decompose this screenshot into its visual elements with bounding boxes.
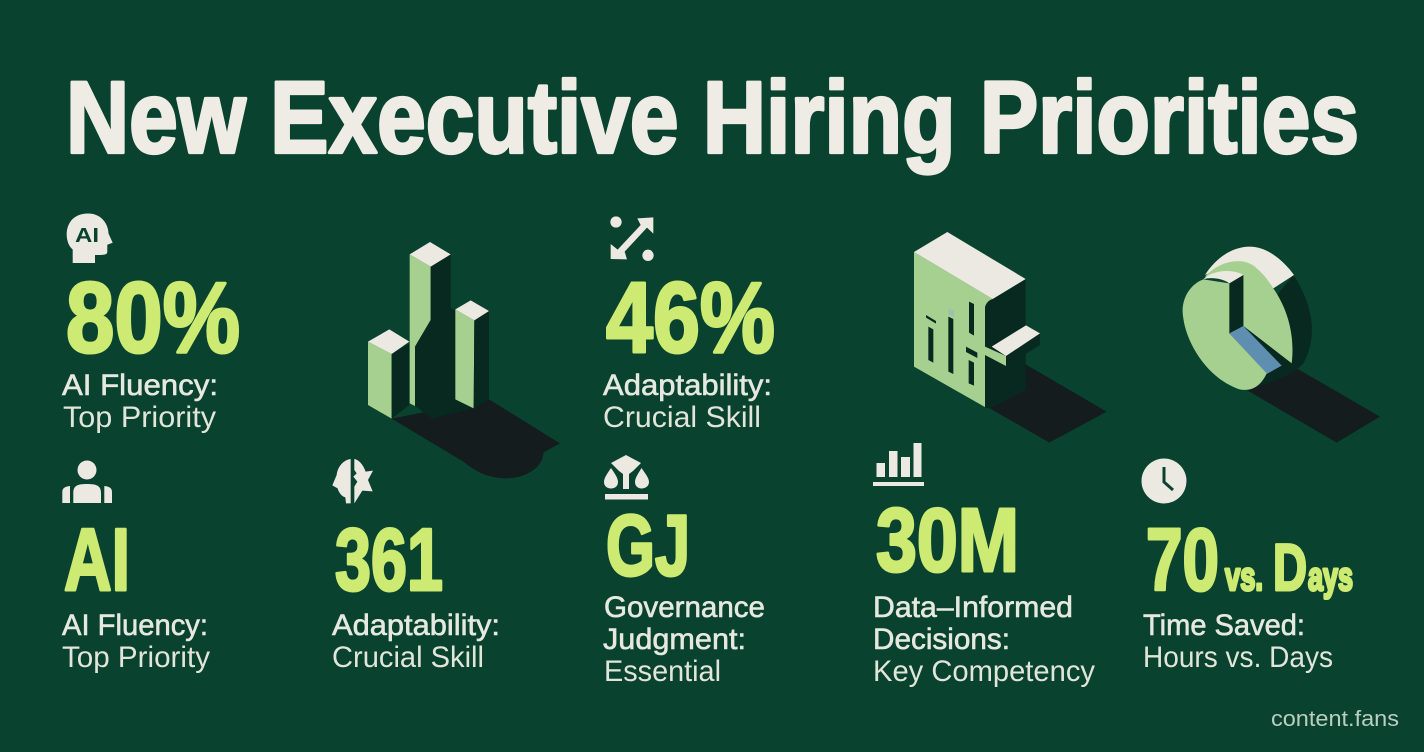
panel: AI fluency xyxy=(62,460,210,674)
icon: bar chart xyxy=(873,443,924,486)
stat: 30M: 30M xyxy=(876,491,1019,591)
stat: 361: 361 xyxy=(335,510,443,609)
pie dark edge xyxy=(1248,275,1312,390)
label: Adaptability: Adaptability: xyxy=(332,609,500,642)
panel: 80% AI fluency xyxy=(62,214,240,434)
stat: ays: ays xyxy=(1308,555,1353,599)
stat: GJ: GJ xyxy=(606,498,690,594)
icon: AI head xyxy=(67,214,113,263)
icon: person xyxy=(62,460,112,503)
label: Governance: Governance xyxy=(604,591,765,624)
panel: data-informed decisions xyxy=(873,443,1095,688)
label: AI Fluency: AI Fluency: xyxy=(62,609,208,642)
middle bar xyxy=(410,242,474,418)
pie small white rim xyxy=(1203,271,1243,283)
label: Adaptability: Adaptability: xyxy=(603,369,772,402)
stat: 46%: 46% xyxy=(606,262,775,374)
stat: 70: 70 xyxy=(1146,510,1219,609)
label: Time Saved: Time Saved: xyxy=(1143,609,1305,642)
panel: governance judgment xyxy=(603,455,765,688)
stat: AI: AI xyxy=(64,510,130,609)
panel: 361 adaptability xyxy=(332,459,500,674)
label: Data-Informed: Data–Informed xyxy=(873,591,1073,624)
chart: isometric pie xyxy=(1183,247,1380,443)
chart: isometric bars xyxy=(368,242,560,478)
pie notch xyxy=(1229,275,1292,366)
building front face xyxy=(914,252,993,408)
icon: governance scale xyxy=(604,455,649,500)
label: Crucial Skill: Crucial Skill xyxy=(332,641,484,674)
label: AI Fluency: AI Fluency: xyxy=(62,369,218,402)
left bar xyxy=(368,329,409,419)
pie back slice xyxy=(1205,261,1293,363)
building roof xyxy=(914,232,1026,299)
label: Judgment: Judgment: xyxy=(603,623,746,656)
icon: AI head: AI xyxy=(75,225,99,247)
building slits xyxy=(926,302,977,386)
label: Essential: Essential xyxy=(604,655,721,688)
right bar xyxy=(455,300,489,408)
pie white rim xyxy=(1205,247,1294,288)
footer credit: content.fans xyxy=(1271,706,1399,731)
label: Crucial Skill: Crucial Skill xyxy=(603,401,761,434)
stat: 80%: 80% xyxy=(66,262,240,374)
icon: expanding arrows xyxy=(610,216,654,261)
icon: split head xyxy=(332,459,373,503)
stat: D: D xyxy=(1273,530,1307,604)
stat: vs.: vs. xyxy=(1225,555,1263,599)
pie front slice xyxy=(1183,279,1267,390)
pie blue wedge xyxy=(1229,326,1282,374)
label: Top Priority: Top Priority xyxy=(62,641,210,674)
chart: isometric building xyxy=(914,232,1107,443)
building dark side xyxy=(985,279,1026,408)
building shadow xyxy=(990,364,1107,443)
icon: clock xyxy=(1142,458,1186,504)
panel: time saved xyxy=(1142,458,1353,674)
label: Top Priority: Top Priority xyxy=(63,401,216,434)
label: Decisions: Decisions: xyxy=(873,623,1010,656)
building shelf xyxy=(985,325,1040,366)
label: Hours vs. Days: Hours vs. Days xyxy=(1143,641,1333,674)
pie shadow xyxy=(1247,368,1380,443)
panel: 46% adaptability xyxy=(603,216,775,434)
label: Key Competency: Key Competency xyxy=(873,655,1095,688)
bar chart shadow xyxy=(392,399,560,478)
